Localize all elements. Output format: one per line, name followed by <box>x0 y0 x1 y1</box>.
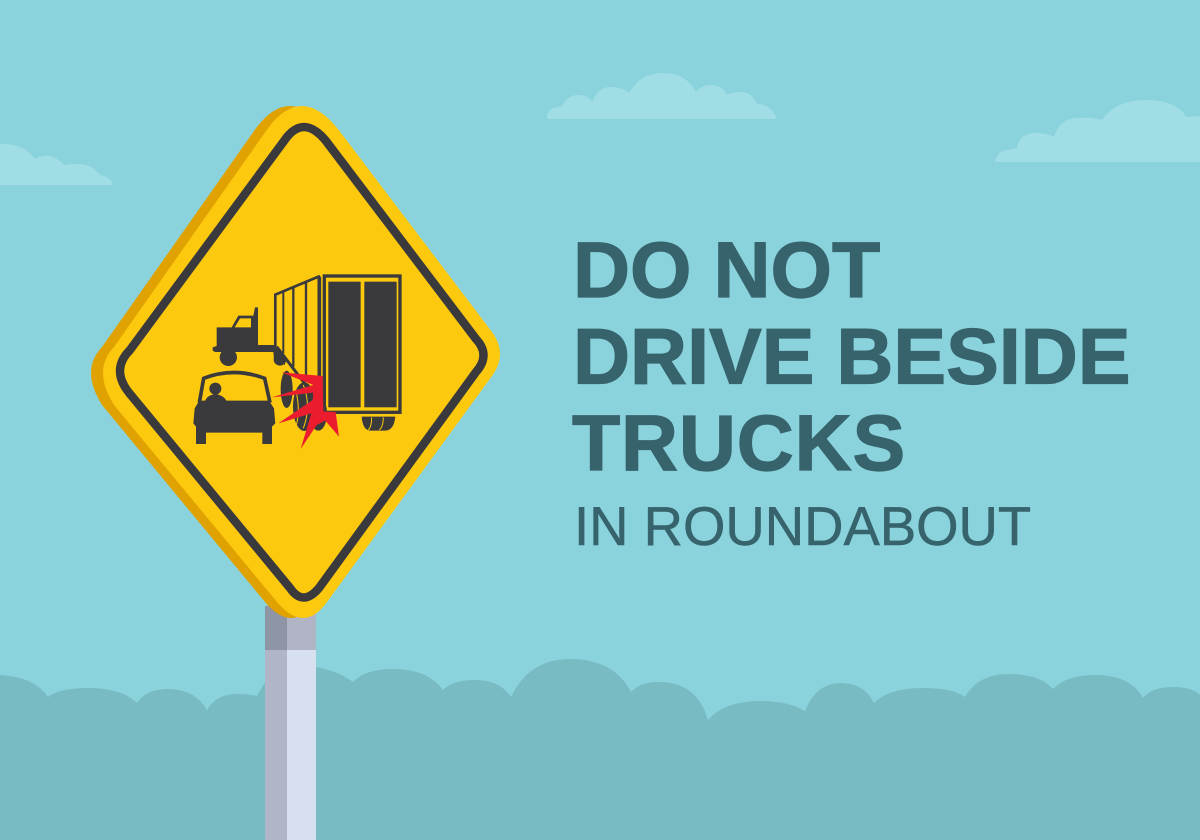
headline line 2: DRIVE BESIDE <box>573 312 1131 400</box>
icon: red impact burst <box>272 372 339 449</box>
icon: truck hitting car <box>193 276 400 449</box>
cloud: left <box>0 144 113 185</box>
icon: trailer rear <box>324 276 400 412</box>
sign post <box>265 606 316 840</box>
cloud: top center <box>547 73 777 119</box>
icon: trailer rear wheels <box>362 417 395 431</box>
headline <box>572 225 1131 487</box>
road sign <box>91 106 500 618</box>
icon: trailer side <box>275 276 320 410</box>
sign side edge <box>91 106 488 618</box>
sign border <box>120 127 484 598</box>
headline line 1: DO NOT <box>573 225 880 314</box>
icon: truck side wheels <box>281 371 327 431</box>
icon: car <box>193 372 275 444</box>
cloud: top right <box>995 100 1200 162</box>
subheading: IN ROUNDABOUT <box>574 496 1031 557</box>
hills <box>0 659 1200 840</box>
icon: truck cab <box>213 307 308 388</box>
headline line 3: TRUCKS <box>572 398 906 487</box>
sign face <box>103 106 500 618</box>
